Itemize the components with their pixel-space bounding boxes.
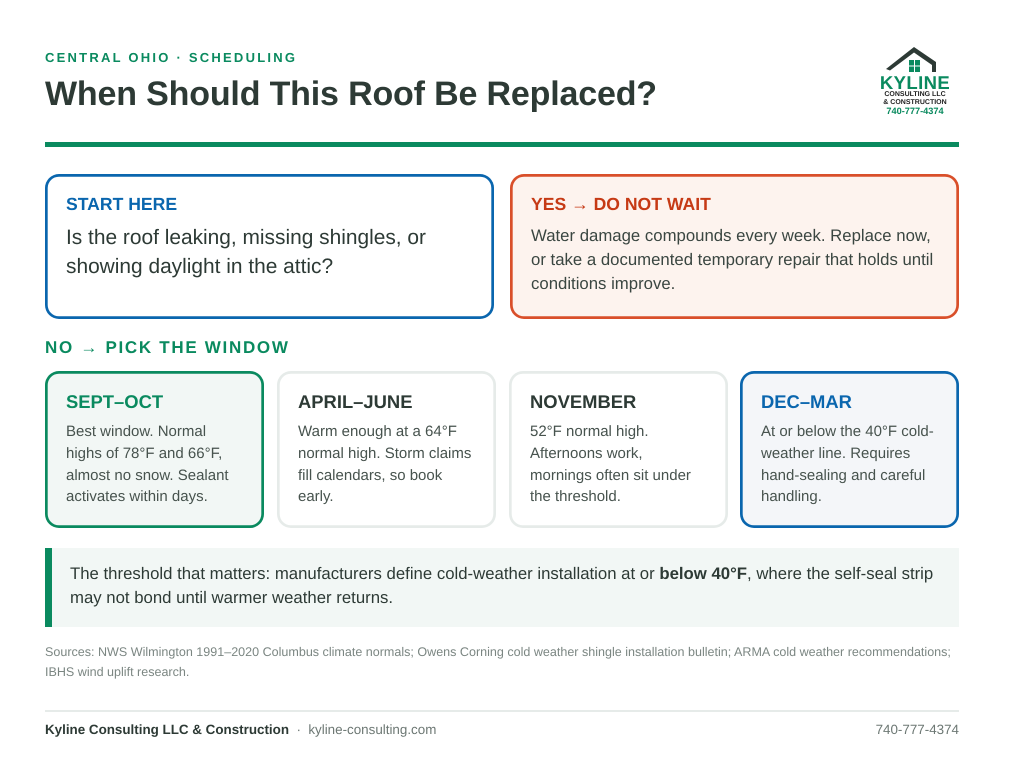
card: sept-oct	[45, 371, 264, 528]
body text: conditions improve.	[531, 274, 675, 293]
heading: start here: START HERE	[66, 194, 177, 214]
panel: start here	[45, 174, 494, 319]
card heading: NOVEMBER	[530, 391, 636, 412]
logo subtitle	[883, 90, 947, 106]
card: november	[509, 371, 728, 528]
body text: or take a documented temporary repair that holds until	[531, 250, 933, 269]
body text	[531, 226, 933, 293]
card text: normal high. Storm claims	[298, 445, 471, 462]
card text: the threshold.	[530, 488, 621, 505]
callout text: The threshold that matters: manufacturers define cold-weather installation at or below 40°F, where the self-seal strip	[70, 564, 933, 583]
card text: At or below the 40°F cold-	[761, 423, 934, 440]
card text: handling.	[761, 488, 822, 505]
sources: IBHS wind uplift research.	[45, 665, 189, 679]
eyebrow: CENTRAL OHIO · SCHEDULING	[45, 50, 297, 65]
card text: Best window. Normal	[66, 423, 206, 440]
footer phone: 740-777-4374	[876, 722, 959, 737]
logo subtitle: & CONSTRUCTION	[883, 98, 947, 106]
logo subtitle: CONSULTING LLC	[884, 90, 946, 98]
sources: Sources: NWS Wilmington 1991–2020 Columbus climate normals; Owens Corning cold weather shingle installation bulletin; ARMA cold weather recommendations;	[45, 645, 951, 659]
card text: Afternoons work,	[530, 445, 643, 462]
card text: fill calendars, so book	[298, 466, 442, 484]
card: april-june	[277, 371, 496, 528]
card text: activates within days.	[66, 488, 208, 505]
panel: yes do not wait	[510, 174, 959, 319]
logo phone: 740-777-4374	[886, 106, 944, 116]
logo	[880, 47, 950, 116]
question text: Is the roof leaking, missing shingles, or	[66, 226, 426, 249]
question text: showing daylight in the attic?	[66, 255, 333, 278]
footer left: Kyline Consulting LLC & Construction · kyline-consulting.com	[45, 722, 436, 737]
header rule	[45, 142, 959, 147]
card text: highs of 78°F and 66°F,	[66, 445, 222, 462]
logo wordmark: KYLINE	[880, 72, 950, 93]
card heading: SEPT–OCT	[66, 391, 163, 412]
title: When Should This Roof Be Replaced?	[45, 75, 657, 113]
heading: yes: YES → DO NOT WAIT	[531, 194, 711, 214]
footer rule	[45, 710, 959, 712]
card text: Warm enough at a 64°F	[298, 423, 457, 440]
card: dec-mar	[740, 371, 959, 528]
sources	[45, 645, 951, 679]
card text	[298, 423, 471, 505]
card text	[761, 423, 934, 505]
card heading: DEC–MAR	[761, 391, 852, 412]
section heading: pick the window: NO → PICK THE WINDOW	[45, 338, 290, 357]
callout text	[70, 564, 933, 607]
card text: 52°F normal high.	[530, 423, 649, 440]
icon: house roof	[886, 47, 936, 72]
card text: weather line. Requires	[761, 445, 910, 462]
card heading: APRIL–JUNE	[298, 391, 412, 412]
callout: threshold	[45, 548, 959, 627]
card text	[66, 423, 229, 505]
question text	[66, 226, 426, 278]
card text	[530, 423, 691, 505]
callout accent bar	[45, 548, 52, 627]
card text: early.	[298, 488, 334, 505]
card text: almost no snow. Sealant	[66, 466, 229, 484]
card text: hand-sealing and careful	[761, 466, 925, 484]
body text: Water damage compounds every week. Replace now,	[531, 226, 931, 245]
callout text: may not bond until warmer weather returns.	[70, 588, 393, 607]
card text: mornings often sit under	[530, 466, 691, 484]
